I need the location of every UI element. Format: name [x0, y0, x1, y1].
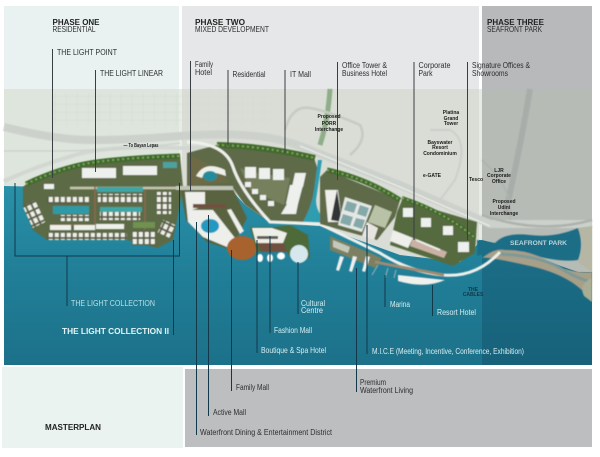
- panel: phase three header: [482, 6, 592, 90]
- map label: the cables: [463, 287, 484, 298]
- panel: phase two header: [182, 6, 479, 90]
- map label: platina grand tower: Tower: [444, 121, 458, 127]
- heading: phase three: PHASE THREE: [487, 18, 545, 27]
- map label: tesco: Tesco: [469, 177, 483, 183]
- callout: residential: Residential: [232, 70, 266, 79]
- map label: proposed porr interchange: Proposed: [317, 114, 341, 120]
- sea: [4, 175, 592, 365]
- heading: phase one: [52, 18, 100, 34]
- map label: bayswater resort condominium: Condominium: [423, 151, 457, 157]
- callout: the light collection bracket: THE LIGHT COLLECTION: [71, 299, 155, 308]
- callout: family hotel: Hotel: [195, 68, 212, 77]
- panel: phase one header: [4, 6, 179, 90]
- callout: residential: [228, 70, 266, 146]
- land: [4, 89, 592, 272]
- map label: proposed porr interchange: [315, 114, 343, 133]
- callout: it mall: [285, 70, 311, 153]
- callout: the light collection ii: [62, 240, 174, 336]
- heading: phase three: [487, 18, 545, 34]
- callout: the light collection bracket: [15, 183, 180, 308]
- callout: corporate park: [414, 61, 451, 240]
- map label: proposed udini interchange: Proposed: [492, 199, 516, 205]
- callout: resort hotel: Resort Hotel: [437, 308, 476, 317]
- road grid and highways: [4, 89, 592, 226]
- map label: bayswater resort condominium: Resort: [432, 145, 448, 151]
- callout: signature offices and showrooms: [468, 61, 531, 240]
- callout: cultural centre: Centre: [301, 306, 324, 315]
- map label: proposed udini interchange: Interchange: [490, 211, 518, 217]
- map label: ljr corporate office: Corporate: [487, 173, 511, 179]
- panel: masterplan footer: [2, 367, 183, 448]
- heading: masterplan: MASTERPLAN: [45, 423, 101, 432]
- callout: office tower and business hotel: [338, 61, 388, 180]
- callout: signature offices and showrooms: Signature Offices &: [472, 61, 531, 70]
- map label: the cables: THE: [468, 287, 479, 293]
- callout: marina: Marina: [390, 300, 410, 309]
- callout: family hotel: Family: [195, 60, 213, 69]
- phase three sea shade: [482, 232, 592, 365]
- callout: corporate park: Corporate: [418, 61, 451, 70]
- map label: ljr corporate office: [487, 168, 511, 185]
- callout: office tower and business hotel: Office Tower &: [342, 61, 388, 70]
- seafront park lagoon and shore: [477, 226, 592, 302]
- callout: the light point: THE LIGHT POINT: [57, 48, 117, 57]
- map label: proposed porr interchange: Interchange: [315, 127, 343, 133]
- callout: resort hotel: [432, 285, 476, 317]
- heading: phase three: SEAFRONT PARK: [487, 25, 543, 34]
- map label: proposed porr interchange: PORR: [322, 121, 337, 127]
- map label: proposed udini interchange: Udini: [498, 205, 511, 211]
- map label: bayswater resort condominium: [423, 140, 457, 157]
- callout: signature offices and showrooms: Showrooms: [472, 69, 508, 78]
- map label: seafront park: SEAFRONT PARK: [510, 240, 567, 247]
- heading: phase two: MIXED DEVELOPMENT: [195, 25, 269, 34]
- callout: premium waterfront living: Premium: [360, 378, 386, 387]
- callout: it mall: IT Mall: [290, 70, 311, 79]
- callout: cultural centre: Cultural: [301, 299, 325, 308]
- heading: phase two: PHASE TWO: [195, 18, 245, 27]
- map label: proposed udini interchange: [490, 199, 518, 217]
- map label: to bayan lepas: — To Bayan Lepas: [124, 143, 159, 149]
- callout: fashion mall: Fashion Mall: [274, 326, 312, 335]
- map label: platina grand tower: Platina: [443, 110, 459, 116]
- callout: office tower and business hotel: Business Hotel: [342, 69, 387, 78]
- map label: the cables: CABLES: [463, 292, 484, 298]
- callout: premium waterfront living: Waterfront Living: [360, 386, 413, 395]
- callout: active mall: Active Mall: [213, 408, 246, 417]
- masterplan map: [4, 89, 592, 365]
- callout: boutique and spa hotel: Boutique & Spa Hotel: [261, 346, 326, 355]
- callout: mice: M.I.C.E (Meeting, Incentive, Conference, Exhibition): [372, 347, 524, 356]
- callout: the light collection ii: THE LIGHT COLLECTION II: [62, 327, 169, 336]
- callout: family mall: Family Mall: [236, 383, 269, 392]
- map label: e-gate: e-GATE: [423, 173, 442, 179]
- panel: footer right: [185, 369, 592, 447]
- callout: waterfront dining and entertainment district: Waterfront Dining & Entertainment District: [200, 428, 333, 437]
- heading: phase two: [195, 18, 269, 34]
- callout: fashion mall: [270, 236, 312, 335]
- heading: phase one: PHASE ONE: [52, 18, 100, 27]
- map label: bayswater resort condominium: Bayswater: [427, 140, 453, 146]
- callout: boutique and spa hotel: [257, 240, 326, 355]
- callout: marina: [385, 275, 410, 309]
- phase two waterfront development: [176, 142, 500, 285]
- map label: ljr corporate office: LJR: [494, 168, 504, 174]
- map label: ljr corporate office: Office: [492, 179, 506, 185]
- callout: the light point: [52, 48, 117, 178]
- callout: corporate park: Park: [418, 69, 433, 78]
- phase one island: [23, 155, 183, 248]
- callout: the light linear: [96, 69, 163, 172]
- heading: phase one: RESIDENTIAL: [52, 25, 96, 34]
- callout: premium waterfront living: [356, 268, 413, 395]
- callout: cultural centre: [298, 262, 325, 315]
- callout: the light linear: THE LIGHT LINEAR: [100, 69, 163, 78]
- map label: platina grand tower: [443, 110, 459, 127]
- map label: platina grand tower: Grand: [444, 116, 458, 122]
- callout: family hotel: [190, 60, 213, 191]
